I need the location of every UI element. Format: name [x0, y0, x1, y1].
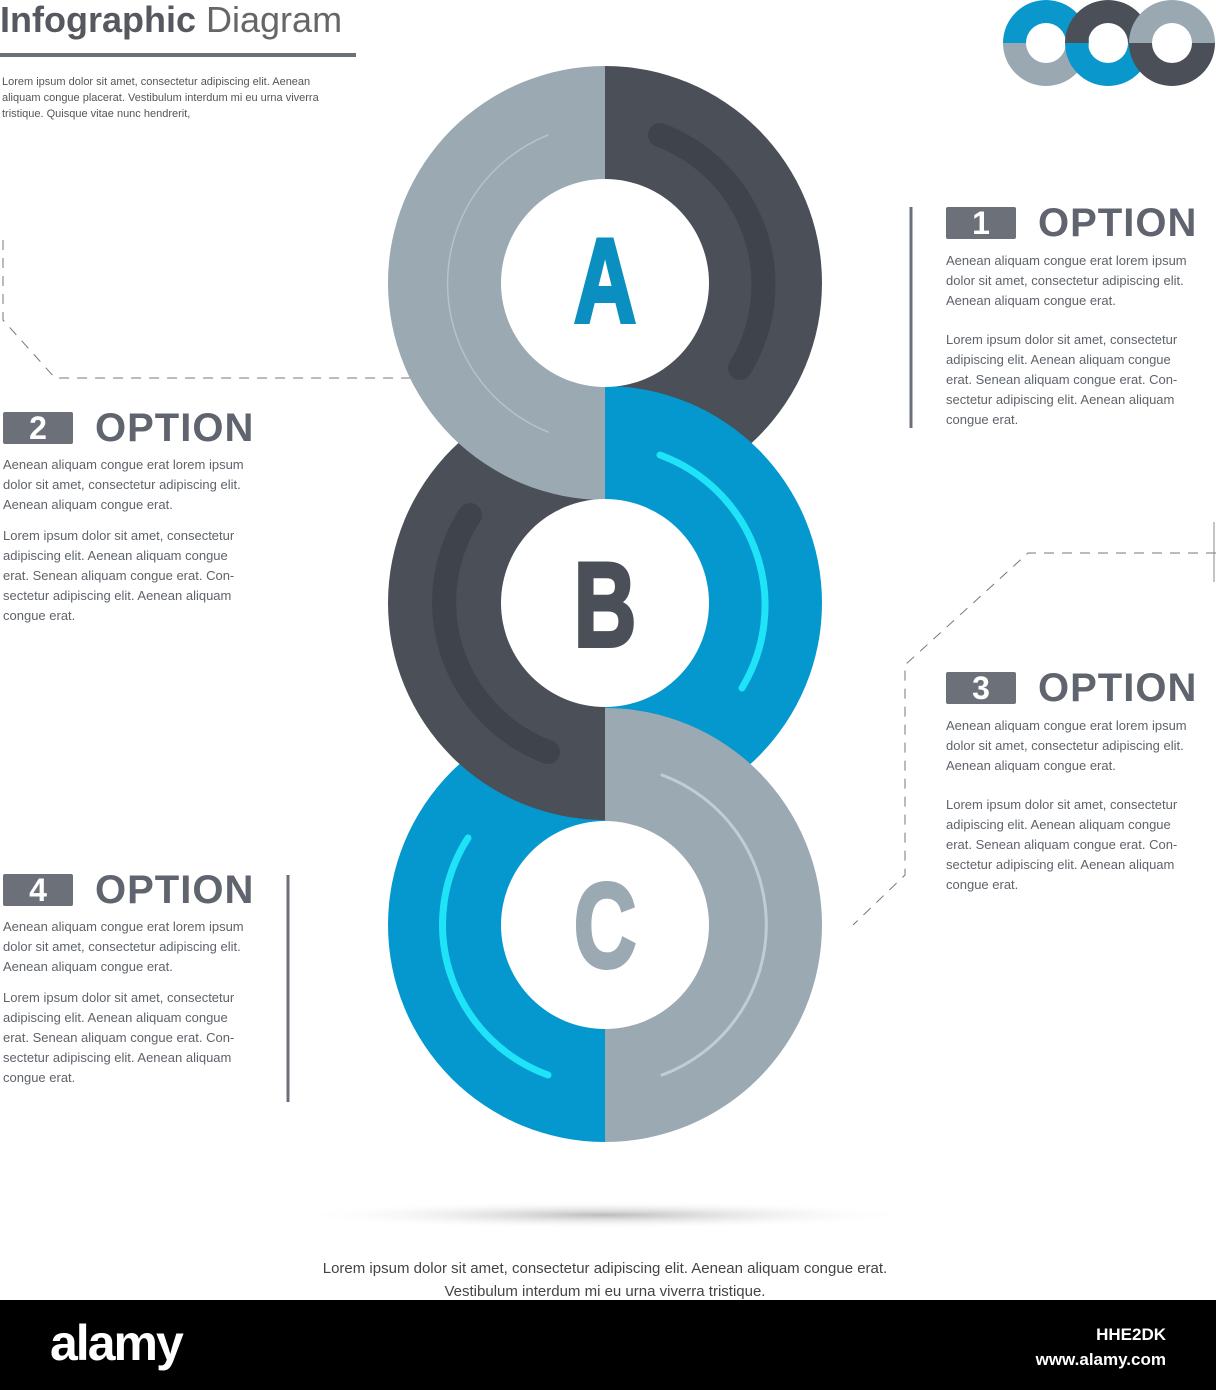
- option 3: [946, 666, 1197, 892]
- option 1: [946, 201, 1197, 427]
- option 4: OPTION: [95, 868, 254, 912]
- circle C right (gray): [605, 708, 822, 1142]
- inner white circles: [501, 179, 709, 387]
- option 3: 3: [972, 670, 990, 706]
- alamy bar: [0, 1300, 1216, 1390]
- inner arcs: [443, 135, 766, 1075]
- option 3: OPTION: [1038, 666, 1197, 710]
- alamy bar: HHE2DK: [1096, 1325, 1166, 1344]
- vertical lines: [910, 207, 912, 428]
- option 3: Lorem ipsum dolor sit amet, consectetur adipiscing elit. Aenean aliquam congue erat. Senean aliquam congue erat. Con-sectetur adipiscing elit. Aenean aliquam congue erat.: [946, 797, 1177, 892]
- footer text: Lorem ipsum dolor sit amet, consectetur adipiscing elit. Aenean aliquam congue erat. Vestibulum interdum mi eu urna viverra tristique.: [323, 1260, 887, 1300]
- letters: [574, 214, 636, 993]
- letters: B: [574, 538, 636, 672]
- letters: C: [574, 859, 636, 993]
- letters: A: [574, 214, 636, 348]
- option 1: OPTION: [1038, 201, 1197, 245]
- title: Infographic Diagram: [0, 0, 342, 40]
- option 1: 1: [972, 205, 990, 241]
- circle C left (blue): [388, 708, 605, 1142]
- intro text: Lorem ipsum dolor sit amet, consectetur adipiscing elit. Aenean aliquam congue placerat. Vestibulum interdum mi eu urna viverra tristique. Quisque vitae nunc hendrerit,: [2, 76, 319, 120]
- option 4: Aenean aliquam congue erat lorem ipsum dolor sit amet, consectetur adipiscing elit. Aenean aliquam congue erat.: [3, 919, 244, 974]
- circle B left (dark): [388, 386, 605, 820]
- option 2: [3, 406, 254, 623]
- option 3: Aenean aliquam congue erat lorem ipsum dolor sit amet, consectetur adipiscing elit. Aenean aliquam congue erat.: [946, 718, 1187, 773]
- circle B right (blue): [605, 386, 822, 820]
- option 2: Lorem ipsum dolor sit amet, consectetur adipiscing elit. Aenean aliquam congue erat. Senean aliquam congue erat. Con-sectetur adipiscing elit. Aenean aliquam congue erat.: [3, 528, 234, 623]
- alamy bar: www.alamy.com: [1036, 1350, 1166, 1369]
- dashed connectors: [3, 240, 1216, 925]
- circle A right (dark): [605, 66, 822, 500]
- option 4: [3, 868, 254, 1085]
- option 4: 4: [29, 872, 47, 908]
- option 2: Aenean aliquam congue erat lorem ipsum dolor sit amet, consectetur adipiscing elit. Aenean aliquam congue erat.: [3, 457, 244, 512]
- alamy bar: alamy: [50, 1315, 182, 1371]
- logo: three rings: [1003, 0, 1215, 86]
- option 2: 2: [29, 410, 47, 446]
- circle A left (gray): [388, 66, 605, 500]
- option 4: Lorem ipsum dolor sit amet, consectetur adipiscing elit. Aenean aliquam congue erat. Senean aliquam congue erat. Con-sectetur adipiscing elit. Aenean aliquam congue erat.: [3, 990, 234, 1085]
- option 2: OPTION: [95, 406, 254, 450]
- option 1: Aenean aliquam congue erat lorem ipsum dolor sit amet, consectetur adipiscing elit. Aenean aliquam congue erat.: [946, 253, 1187, 308]
- title: [0, 0, 356, 57]
- shadow: [295, 1201, 915, 1229]
- option 1: Lorem ipsum dolor sit amet, consectetur adipiscing elit. Aenean aliquam congue erat. Senean aliquam congue erat. Con-sectetur adipiscing elit. Aenean aliquam congue erat.: [946, 332, 1177, 427]
